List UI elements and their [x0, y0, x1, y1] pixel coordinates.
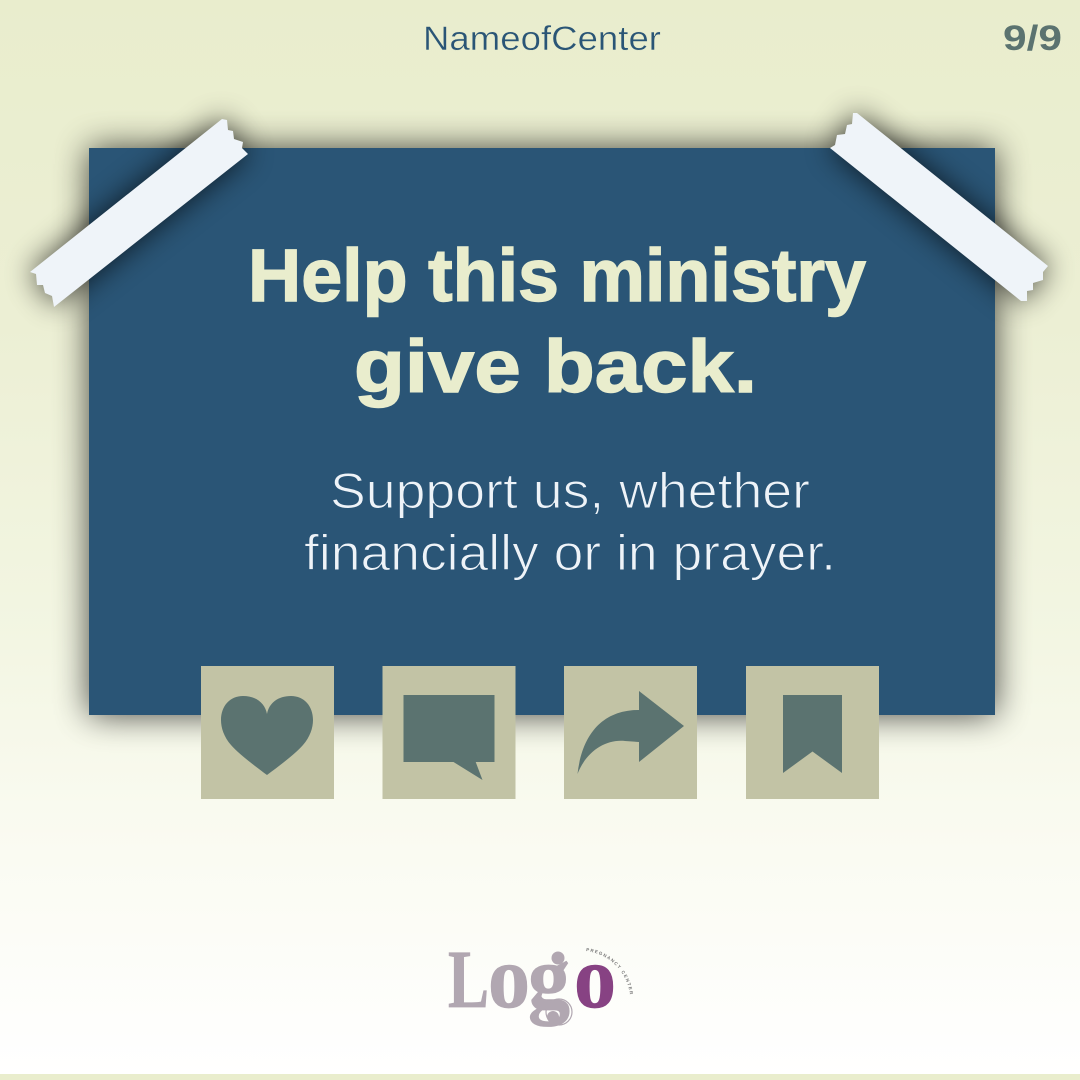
logo: PREGNANCY CENTER [586, 948, 633, 994]
page number: 9/9 [1003, 19, 1062, 58]
center name: NameofCenter [423, 20, 661, 58]
logo: o [488, 929, 530, 1027]
icon: share arrow [564, 666, 697, 799]
logo [448, 929, 633, 1027]
heading: give back. [354, 325, 757, 408]
logo: L [448, 933, 489, 1025]
supporting text: financially or in prayer. [304, 525, 836, 581]
supporting text: Support us, whether [330, 463, 810, 519]
panel: call to action card [89, 148, 995, 715]
tape: top right [830, 113, 1048, 301]
logo: g [528, 929, 570, 1027]
heading: Help this ministry [248, 234, 866, 317]
logo: o [574, 929, 616, 1027]
icon: heart [201, 666, 334, 799]
supporting text [304, 463, 836, 581]
tape: top left [30, 119, 248, 307]
heading [248, 234, 866, 408]
icon: comment bubble [382, 666, 516, 799]
icon: bookmark [746, 666, 879, 799]
